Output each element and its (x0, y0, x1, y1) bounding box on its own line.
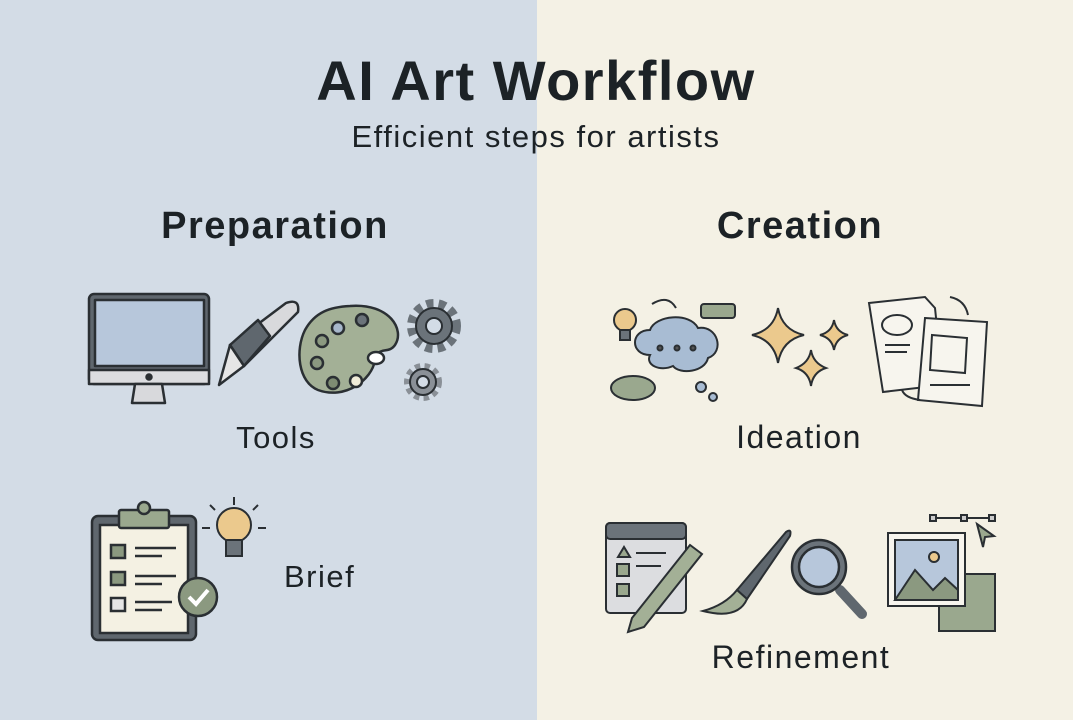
icon: paintbrush (703, 531, 790, 614)
icon: sketch papers (869, 297, 987, 406)
heading: Creation: Creation (717, 205, 883, 247)
subtitle: Efficient steps for artists (352, 119, 720, 154)
label: Brief: Brief (284, 559, 355, 594)
icon: palette (299, 306, 398, 393)
icon: clipboard (92, 502, 217, 640)
icon: image frame (888, 515, 995, 631)
label: Ideation: Ideation (736, 419, 862, 455)
icon: stylus pen (219, 302, 298, 385)
label: Refinement: Refinement (712, 639, 890, 675)
label: Tools: Tools (236, 420, 316, 455)
icon: thought cloud (611, 300, 735, 401)
icon: sparkles (752, 308, 848, 386)
icon: editor window with pencil (606, 523, 702, 632)
icon: monitor (89, 294, 209, 403)
title: AI Art Workflow (316, 49, 756, 112)
icon: gears (408, 304, 456, 397)
icon: bulb (202, 497, 266, 556)
icon: magnifier (792, 540, 862, 614)
heading: Preparation: Preparation (161, 205, 389, 247)
